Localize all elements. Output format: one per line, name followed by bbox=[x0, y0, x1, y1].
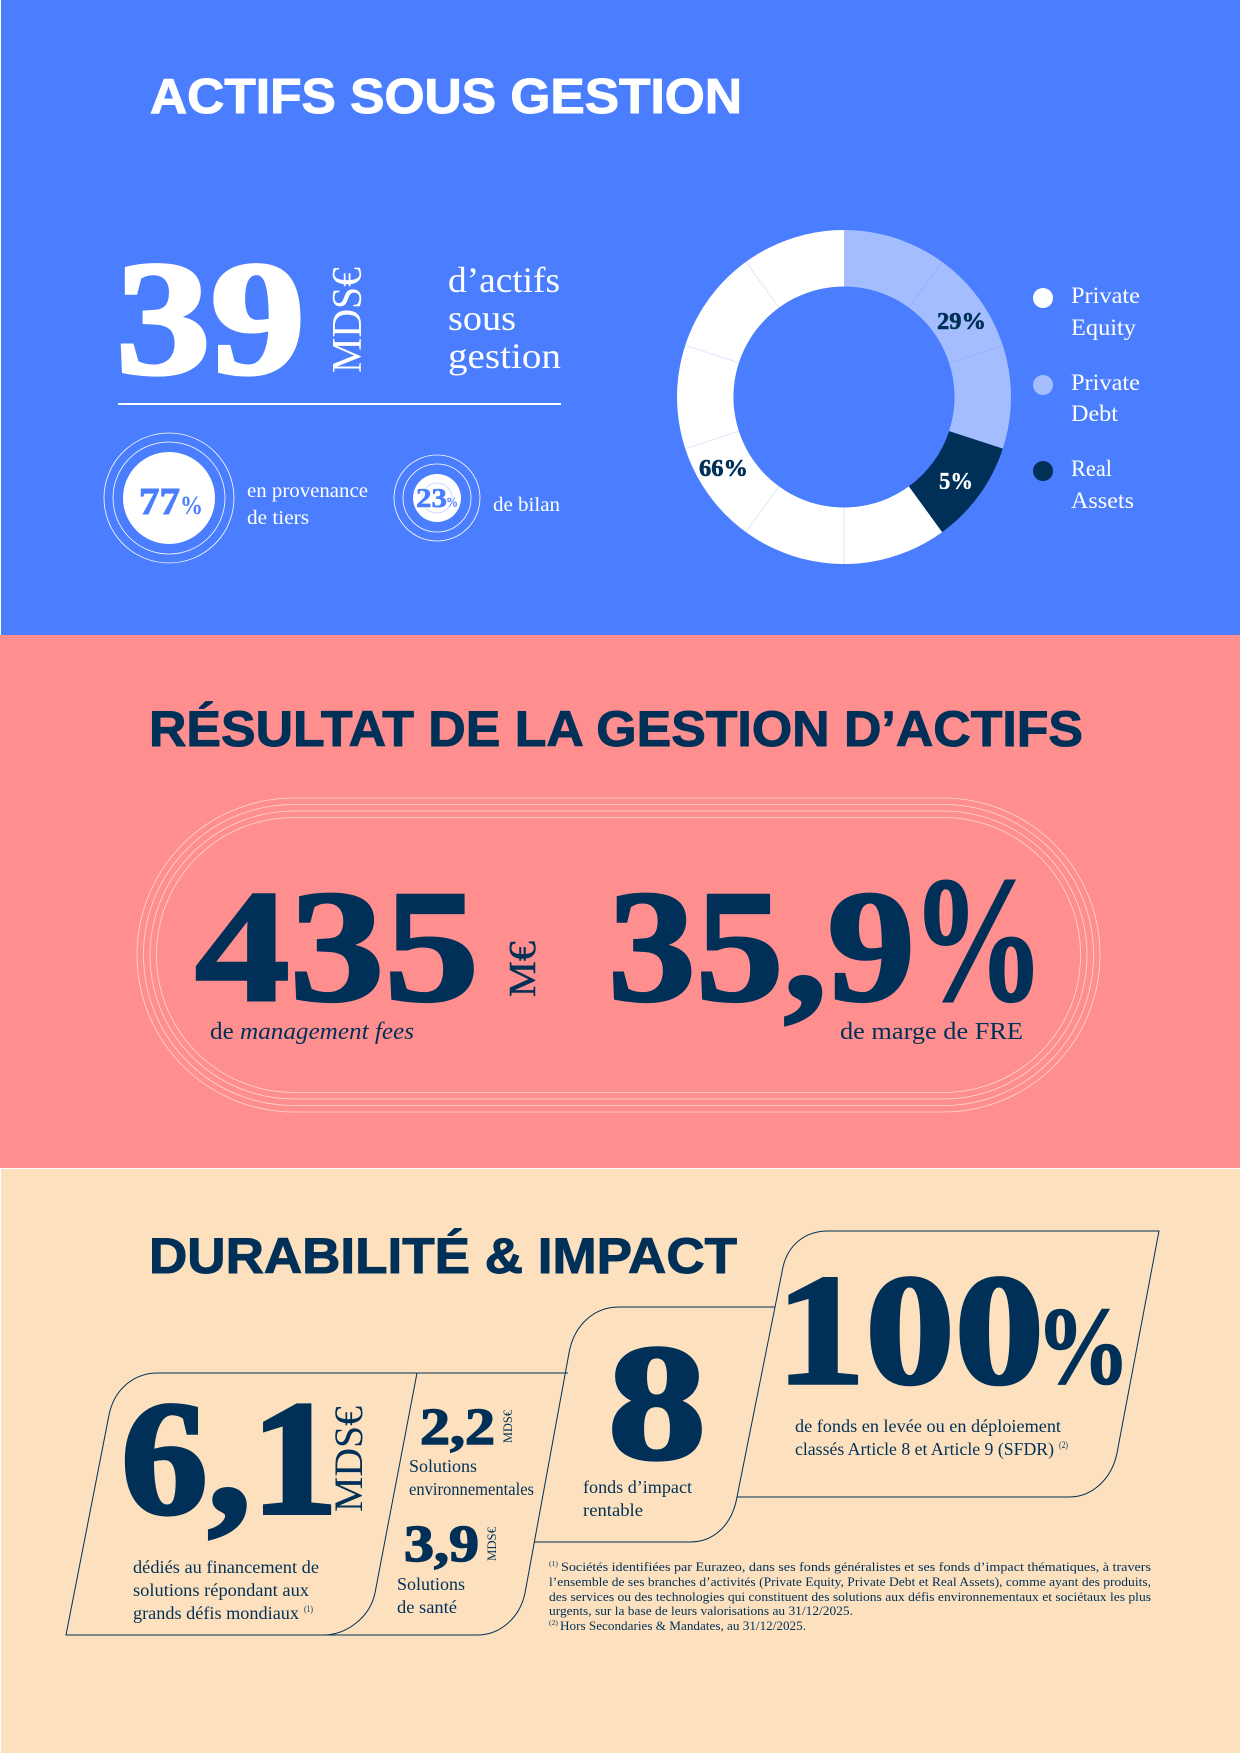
title: durabilité et impact: DURABILITÉ & IMPACT bbox=[149, 1228, 737, 1284]
text: en provenance de tiers: en provenance bbox=[247, 480, 368, 502]
footnotes: l’ensemble de ses branches d’activités (Private Equity, Private Debt et Real Assets), comme ayant des produits, bbox=[549, 1575, 1151, 1589]
text: d'actifs sous gestion: sous bbox=[448, 298, 516, 338]
text: en provenance de tiers: de tiers bbox=[247, 507, 309, 529]
stat: 100%: classés Article 8 et Article 9 (SFDR) bbox=[795, 1439, 1054, 1460]
badge: 23% bbox=[394, 455, 480, 541]
stat: 2,2 MDS€: MDS€ bbox=[500, 1410, 515, 1443]
big number 35,9% bbox=[608, 840, 1045, 1039]
legend: Real bbox=[1071, 456, 1112, 481]
stat: 100%: (2) bbox=[1059, 1440, 1068, 1450]
big number 35,9%: 35,9 bbox=[608, 857, 915, 1035]
footnotes: urgents, sur la base de leurs valorisations au 31/12/2025. bbox=[549, 1604, 853, 1618]
text: d'actifs sous gestion: d’actifs bbox=[448, 260, 560, 300]
stat: 2,2 MDS€: Solutions bbox=[409, 1456, 477, 1476]
legend: Debt bbox=[1071, 401, 1119, 426]
legend: Private bbox=[1071, 370, 1140, 395]
label: 66%: 66% bbox=[699, 456, 748, 482]
pill outlines bbox=[137, 798, 1100, 1112]
label: 5%: 5% bbox=[939, 469, 973, 495]
big number 435: 435 bbox=[195, 857, 479, 1035]
stat: 3,9 MDS€: Solutions bbox=[397, 1574, 465, 1594]
stat: 2,2 MDS€ bbox=[409, 1399, 534, 1499]
donut chart bbox=[677, 230, 1011, 564]
footnotes: Sociétés identifiées par Eurazeo, dans ses fonds généralistes et ses fonds d’impact thématiques, à travers bbox=[561, 1560, 1151, 1574]
stat: 3,9 MDS€: 3,9 bbox=[404, 1516, 479, 1573]
text: d'actifs sous gestion bbox=[448, 260, 561, 376]
title: résultat de la gestion d'actifs: RÉSULTAT DE LA GESTION D’ACTIFS bbox=[149, 701, 1083, 757]
stat: 100% bbox=[776, 1243, 1130, 1460]
badge: 77% bbox=[104, 433, 234, 563]
stat: 8 fonds d'impact: fonds d’impact bbox=[583, 1477, 692, 1497]
parallelogram outlines bbox=[66, 1231, 1159, 1635]
badge: 77%: 77 bbox=[139, 481, 180, 523]
title: actifs sous gestion: ACTIFS SOUS GESTION bbox=[150, 70, 742, 124]
stat: 6,1 MDS€: (1) bbox=[304, 1604, 313, 1614]
footnotes: des services ou des technologies qui constituent des solutions aux défis environnementaux et sociétaux les plus bbox=[549, 1590, 1151, 1604]
stat: 6,1 MDS€: 6,1 bbox=[121, 1369, 338, 1549]
stat: 6,1 MDS€: dédiés au financement de bbox=[133, 1557, 319, 1577]
stat: 6,1 MDS€: solutions répondant aux bbox=[133, 1580, 309, 1600]
text: de management fees: de management fees bbox=[210, 1019, 414, 1045]
legend: Assets bbox=[1071, 488, 1134, 513]
label: 29%: 29% bbox=[937, 309, 986, 335]
stat: 6,1 MDS€: MDS€ bbox=[326, 1406, 371, 1512]
footnotes: (2) bbox=[549, 1619, 559, 1627]
text: d'actifs sous gestion: gestion bbox=[448, 336, 561, 376]
stat: 6,1 MDS€: grands défis mondiaux bbox=[133, 1603, 299, 1623]
stat: 8 fonds d'impact bbox=[583, 1311, 706, 1520]
panel: actifs sous gestion bbox=[1, 0, 1240, 635]
stat: 2,2 MDS€: 2,2 bbox=[420, 1399, 495, 1456]
stat: 3,9 MDS€ bbox=[397, 1516, 499, 1617]
stat: 6,1 MDS€ bbox=[121, 1369, 371, 1623]
stat: 8 fonds d'impact: rentable bbox=[583, 1500, 643, 1520]
unit MDS€: MDS€ bbox=[325, 267, 371, 373]
legend: Private bbox=[1071, 283, 1140, 308]
big number 35,9%: % bbox=[911, 840, 1045, 1039]
panel: résultat de la gestion d'actifs bbox=[0, 635, 1240, 1168]
text: de bilan: de bilan bbox=[493, 494, 560, 516]
stat: 8 fonds d'impact: 8 bbox=[608, 1311, 706, 1494]
stat: 3,9 MDS€: MDS€ bbox=[484, 1527, 499, 1561]
unit M€: M€ bbox=[502, 941, 544, 997]
stat: 3,9 MDS€: de santé bbox=[397, 1597, 457, 1617]
stat: 100%: 100 bbox=[776, 1243, 1044, 1418]
text: de marge de FRE: de marge de FRE bbox=[840, 1019, 1023, 1045]
panel: durabilité et impact bbox=[1, 1169, 1240, 1753]
stat: 100%: % bbox=[1036, 1285, 1130, 1407]
badge: 23%: 23 bbox=[416, 483, 447, 513]
footnotes: (1) bbox=[549, 1560, 559, 1568]
big number 39: 39 bbox=[116, 229, 305, 409]
badge: 77%: % bbox=[180, 491, 203, 520]
stat: 100%: de fonds en levée ou en déploiement bbox=[795, 1416, 1061, 1436]
text: en provenance de tiers bbox=[247, 480, 368, 529]
stat: 2,2 MDS€: environnementales bbox=[409, 1479, 534, 1499]
badge: 23%: % bbox=[446, 495, 458, 511]
legend bbox=[1033, 283, 1140, 513]
footnotes bbox=[549, 1560, 1151, 1633]
footnotes: Hors Secondaries & Mandates, au 31/12/2025. bbox=[560, 1619, 806, 1633]
legend: Equity bbox=[1071, 315, 1137, 340]
